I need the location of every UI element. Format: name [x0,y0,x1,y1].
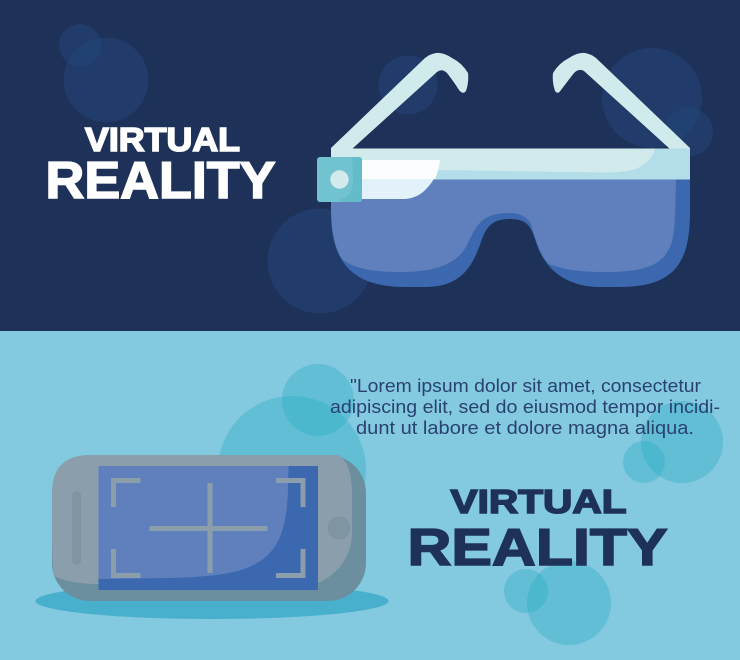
heading: top virtual reality: VIRTUAL [85,122,240,159]
viewfinder brackets [114,480,303,576]
ground shadow [36,583,388,619]
lens highlight [331,179,676,272]
phone body shadow [52,455,366,601]
background bubbles: top panel [59,24,713,314]
speaker [72,491,81,565]
icon: smartphone on its side [36,455,388,619]
display prism [360,160,440,199]
background bubbles: bottom panel [218,364,723,645]
left temple arm [331,53,468,154]
screen [98,466,318,590]
phone body highlight [52,455,352,584]
heading: top virtual reality: REALITY [46,152,276,210]
text block: lorem ipsum [330,375,720,438]
icon: VR glasses [317,53,690,287]
top band [331,148,690,180]
text block: lorem ipsum: "Lorem ipsum dolor sit amet, consectetur [350,375,701,396]
lens shadow [331,179,690,287]
camera module [317,157,362,202]
heading: bottom virtual reality: REALITY [408,519,668,577]
panel: bottom light blue banner [0,331,740,660]
heading: bottom virtual reality [408,484,668,577]
band highlight [331,148,655,173]
crosshair [150,483,268,573]
home button [328,516,350,540]
panel: top navy banner [0,0,740,331]
heading: bottom virtual reality: VIRTUAL [450,484,626,521]
right temple arm [553,53,690,154]
screen highlight [98,466,288,579]
text block: lorem ipsum: dunt ut labore et dolore magna aliqua. [356,417,694,438]
text block: lorem ipsum: adipiscing elit, sed do eiusmod tempor incidi- [330,396,720,417]
heading: top virtual reality [46,122,276,210]
